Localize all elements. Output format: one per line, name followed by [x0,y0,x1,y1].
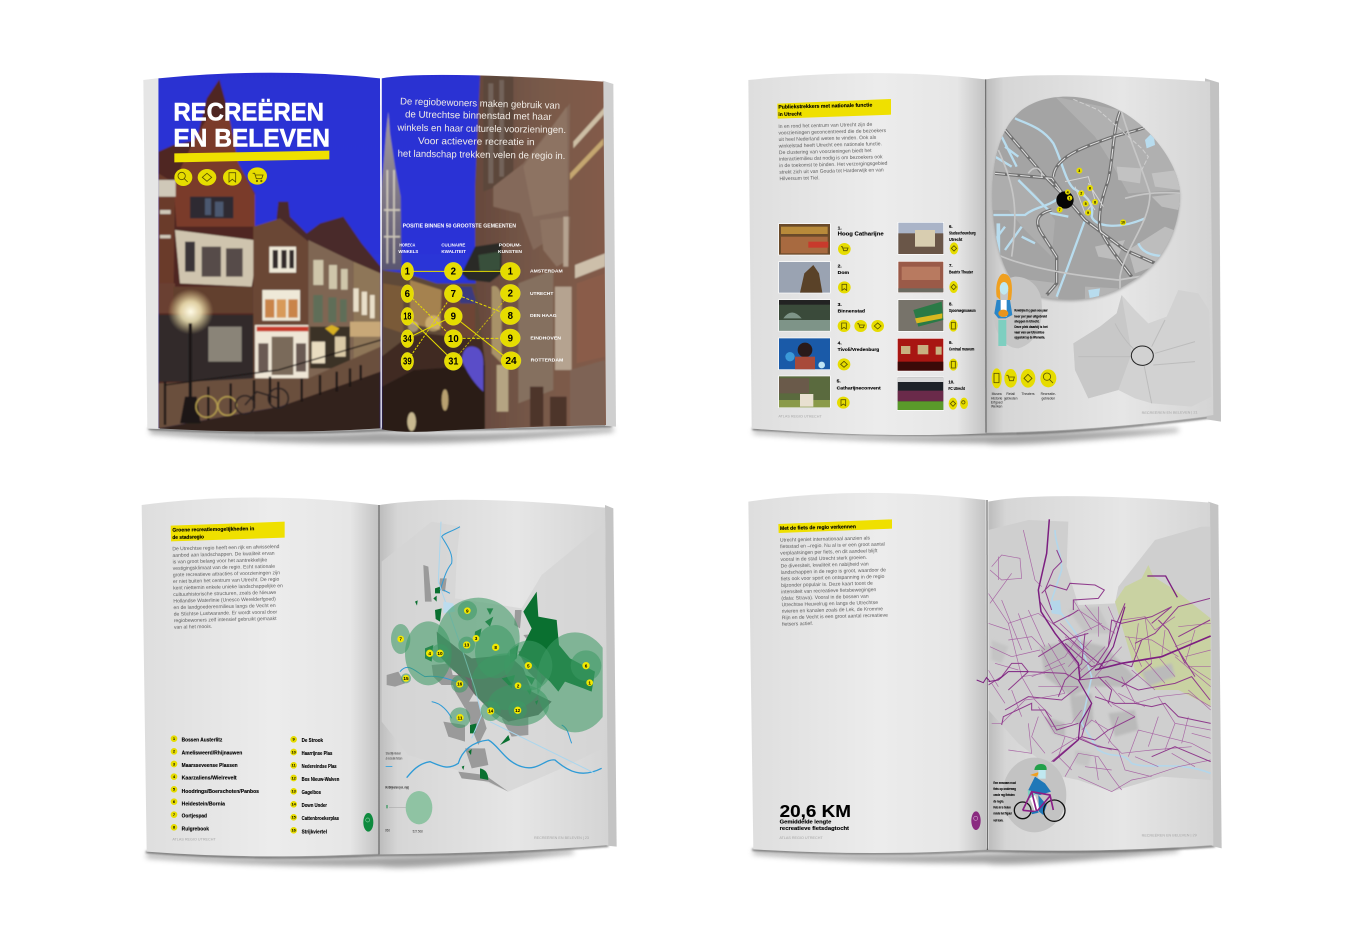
intro paragraph: Hollandse Waterlinie (Unesco Werelderfgoed) [173,596,276,605]
intro paragraph: In en rond het centrum van Utrecht zijn de [778,122,873,130]
bubble text: de regio. [993,799,1004,803]
point numbers: 3 [1078,169,1080,173]
item 10 [948,379,968,410]
intro paragraph: rivieren en kanalen zoals de Lek, de Kromme [782,606,883,615]
marker numbers: 7 [399,637,402,642]
right page [379,500,608,854]
spread 1: photo opening spread "Recreëren en beleven" [143,67,616,444]
title [173,99,330,152]
marker numbers: 1 [588,680,591,685]
numbered list of green areas: Kaarzaliens/Wielrevelt [182,776,237,782]
point numbers: 10 [1121,221,1125,225]
rank bubbles [401,262,521,370]
rank numbers: 9 [451,312,457,323]
spread 2 right page content [991,96,1198,414]
numbered list of green areas: Haarrijnse Plas [302,751,332,757]
numbered list of green areas: De Strook [302,738,323,744]
region base [988,520,1211,792]
numbered list of green areas: 5 [173,787,176,792]
numbered list of green areas: 8 [173,825,176,830]
marker numbers: 4 [428,651,431,656]
marker numbers: 14 [488,709,494,714]
legend [991,368,1056,409]
legend: Recreatie- [1041,392,1056,396]
intro text [396,96,566,162]
heading: Publiekstrekkers: Publiekstrekkers met nationale functie [778,103,872,111]
item 10: FC Utrecht [948,386,965,391]
intro paragraph: in de toekomst te binden. Het verzorgingsgebied [779,161,888,169]
numbered list of green areas: Bos Nieuw-Walven [302,777,339,783]
bubble text: fiets op onderweg [993,787,1016,791]
route crossing the spine [977,677,990,683]
intro paragraph: fiets ook voor sport en ontspanning in de regio [781,574,885,582]
centre marker [1056,191,1074,209]
bubble text: Fiets in te treken [993,805,1011,809]
category icons [174,167,267,186]
roads [995,112,1155,295]
item 10: 10. [948,379,954,384]
marker numbers: 15 [403,676,409,681]
heading: Met de fiets: Met de fiets de regio verkennen [780,524,856,532]
marker numbers: 6 [585,663,588,668]
rank numbers: 1 [508,267,514,278]
bubble text: ronde het figuur [993,811,1013,815]
map markers [397,607,593,721]
bubble text: Ruwbijna 8 ç gaan ooa paar [1014,309,1048,313]
rank numbers: 31 [448,357,459,368]
numbered list of green areas: 1 [173,736,176,741]
photo: Catharijneconvent [778,376,831,408]
intro paragraph: winkelstad heeft Utrecht een nationale functie. [779,141,882,150]
bubble text: opgeslokt op de Wismanta. [1014,336,1045,340]
spread 3 right page content [382,522,613,840]
numbered list of green areas: Down Under [302,803,327,809]
numbered list of green areas: 3 [173,761,176,766]
item 3 [838,302,884,332]
legend: gebieden [1004,396,1018,400]
column headers: PODIUM- [499,243,522,248]
intro paragraph: cultuurhistorische structuren, zoals de Nieuwe [173,590,276,598]
numbered list of green areas [171,735,339,835]
title underline [174,151,329,162]
numbered list of green areas: Heidestein/Bornia [182,802,225,808]
numbered list of green areas: 10 [291,749,297,754]
point numbers: 1 [1069,196,1071,200]
rank numbers: 24 [505,356,517,367]
character bubble [993,274,1048,348]
intro paragraph: Hilversum tot Tiel. [779,175,820,182]
city labels: EINDHOVEN [530,335,562,340]
numbered list of green areas: 7 [173,812,176,817]
heading: Groene recreatiemogelijkheden: Groene recreatiemogelijkheden in [172,526,254,534]
marker numbers: 2 [517,683,520,688]
heading: Groene recreatiemogelijkheden [171,522,285,541]
rank numbers: 8 [508,311,514,322]
intro paragraph: Utrecht geniet internationaal aanzien als [780,535,871,544]
photo: Binnenstad [778,299,831,331]
legend: visitors: Verblijvelen (en. mp) [385,785,409,789]
right page stack edge [605,505,617,847]
water [993,118,1182,297]
heading: Publiekstrekkers: in Utrecht [778,111,802,118]
spread 3 book body [142,497,617,868]
cyclist bubble [993,758,1066,832]
intro paragraph: aanbod aan landschappen. De kwaliteit ervan [172,551,275,559]
numbered list of green areas: 14 [291,802,297,807]
city labels: AMSTERDAM [530,268,563,273]
mini map: location in region [1073,290,1212,407]
spread 2 book body [748,73,1221,444]
numbered list of green areas: Maarsseveense Plassen [182,763,238,769]
intro paragraph: van al het moois. [174,624,212,631]
legend: Erfgoed [991,400,1003,404]
footer left: ATLAS REGIO UTRECHT [778,414,823,419]
legend: water [386,751,402,767]
marker numbers: 5 [527,663,530,668]
item 4 [838,340,879,370]
connecting lines [407,271,510,361]
rivers [400,527,602,778]
numbered list of green areas: 12 [291,775,297,780]
spine line [985,500,989,850]
rank numbers: 2 [451,267,456,278]
point numbers [1059,169,1125,225]
urban areas [386,565,528,792]
marker numbers: 16 [457,682,463,687]
spine line [984,79,987,433]
photo: Tivoli/Vredenburg [778,338,831,370]
item 5: 5. [837,379,841,385]
photo: Dom [778,261,831,293]
numbered list of green areas: 2 [173,749,176,754]
intro paragraph: en de landgoederenmilieus langs de Vecht en [173,603,276,611]
point numbers: 9 [1087,211,1089,215]
intro paragraph: De Utrechtse regio heeft een rijk en afwisselend [172,544,280,552]
left margin strip [143,78,160,429]
spread 2 left page content [777,99,976,419]
item 2 [838,264,851,293]
right page stack edge [1208,502,1222,848]
rank numbers: 34 [403,334,412,345]
big number stat: Gemiddelde lengte [780,819,831,825]
bubble text [993,781,1016,822]
intro text: het landschap trekken velen de regio in. [398,149,565,162]
item 6 [949,224,976,254]
water [1052,530,1211,773]
item 6: 6. [949,224,953,229]
marker numbers: 9 [466,608,469,613]
marker numbers [399,608,591,720]
left page [748,493,986,853]
photo: FC Utrecht [897,377,944,411]
column headers: HORECA [399,243,416,248]
bubble text: omde reg fietsten [993,793,1015,797]
legend: Retail [1006,392,1015,396]
item 5: Catharijneconvent [837,386,881,392]
intro paragraph: De diversiteit, kwaliteit en nabijheid van [781,561,869,570]
item 9: 9. [949,340,953,345]
big number stat: recreatieve fietsdagtocht [780,826,849,832]
numbered list of green areas: Strijkviertel [302,829,327,835]
column headers: CULINAIRE [441,243,465,248]
region base [382,556,552,792]
numbered list of green areas: 4 [173,774,176,779]
photo: left page [153,67,387,437]
numbered list of green areas: Nedereindse Plas [302,764,337,770]
legend: gebieden [1041,396,1055,400]
right page [988,496,1213,851]
numbered list of green areas: 9 [293,737,296,742]
urban patches [992,607,1175,767]
marker numbers: 8 [494,645,497,650]
rank numbers: 9 [508,333,514,344]
legend: visitors: 527.508 [413,829,423,833]
bubble text: Deze plek daarbij is het [1014,325,1048,329]
bubble text: Een eenzaam rood [993,781,1016,785]
intro paragraph: grote recreatieve attracties of voorzieningen zijn [173,570,280,578]
item 1 [838,225,884,255]
icon: purple page tab [971,811,981,830]
legend: visitors [385,785,432,833]
bubble text: keer per jaar uitgebreid [1014,314,1047,318]
dense centre [437,632,552,722]
item 3: 3. [838,302,842,308]
book shadow [752,417,1215,444]
spine line [377,505,380,854]
right page stack edge [1205,78,1221,422]
heading: Groene recreatiemogelijkheden: de stadsregio [172,534,204,541]
numbered list of green areas: 15 [291,815,297,820]
spread 3 left page content [171,522,373,842]
bubble text [1014,309,1048,340]
illustrated woman [994,274,1012,346]
item 7 [949,263,973,293]
big number stat: 20,6 KM [780,801,851,821]
marker numbers: 12 [515,708,521,713]
numbered list of green areas: 16 [291,828,297,833]
rank numbers [403,267,517,368]
legend: Historie [991,396,1002,400]
photo: Centraal museum [897,338,944,371]
rank numbers: 7 [451,289,456,300]
point numbers: 8 [1094,200,1096,204]
item 2: Dom [838,270,850,276]
intro paragraph: kent niettemin enkele unieke landschappelijke en [173,583,283,592]
photo: Beatrix Theater [898,261,944,293]
green forests [415,587,595,780]
point numbers: 2 [1080,192,1082,196]
legend: Musea [992,392,1002,396]
illustrated cyclist [1014,764,1065,821]
item 9 [949,340,974,371]
title: RECREËREN [173,99,324,127]
legend: visitors: 950 [385,829,390,833]
numbered list of green areas: Bossen Austerlitz [182,737,223,743]
big number stat [780,801,851,832]
rank numbers: 2 [508,289,513,300]
column headers [398,243,523,254]
footer left: ATLAS REGIO UTRECHT [779,836,824,840]
legend: water: Stedlijk kleien [386,751,401,755]
column headers: WINKELS [398,249,418,254]
marker numbers: 13 [464,643,470,648]
main routes [988,519,1211,762]
point numbers: 7 [1059,208,1061,212]
rank numbers: 6 [405,289,411,300]
intro paragraph: de Stichtse Lustwarande. Er wordt vooral door [174,609,278,618]
numbered list of green areas: 11 [292,763,297,768]
item 5 [837,379,881,409]
intro text: de Utrechtse binnenstad met haar [405,109,553,123]
item 7: 7. [949,263,953,268]
column headers: KUNSTEN [498,249,523,254]
city labels: ROTTERDAM [531,358,563,363]
heading: Publiekstrekkers [777,99,891,119]
rank numbers: 1 [405,267,411,278]
intro paragraph: strekt zich uit van Gouda tot Harderwijk en van [779,167,884,176]
intro paragraph: landschappen in de regio is groot, waardoor de [781,567,886,576]
intro paragraph: regiobewoners zelf intensief gebruikt gemaakt [174,616,277,624]
intro text: De regiobewoners maken gebruik van [400,96,560,112]
photo: Stadsschouwburg [898,222,944,255]
marker numbers: 11 [458,715,463,720]
intro paragraph: intensiteit van recreatieve fietsbewegingen [781,587,877,595]
numbered list of green areas: Oortjespad [182,814,207,820]
city labels: UTRECHT [530,291,553,296]
marker numbers: 3 [475,636,478,641]
numbered list of green areas: Cattenbroekerplas [302,816,339,822]
photo: right page [378,67,615,437]
thin routes [988,530,1211,792]
green heuvelrug [1115,565,1211,707]
item 8: Spoorwegmuseum [949,308,976,313]
numbered list of green areas: Gagelbos [302,790,321,796]
bubble text: vaar van uw Utrechtse [1014,330,1044,334]
intro paragraph: er niet buiten het centrum van Utrecht. De regio [173,577,280,585]
numbered list of green areas: Amelisweerd/Rhijnauwen [182,751,242,757]
chart heading: POSITIE BINNEN 50 GROOTSTE GEMEENTEN [403,223,516,229]
rank numbers: 18 [403,312,412,323]
item 4: Tivoli/Vredenburg [838,347,879,353]
left page [142,497,379,856]
left page [748,73,986,435]
footer right: RECREËREN EN BELEVEN | 23 [534,836,589,840]
intro paragraph: (data: Strava). Vooral in de bossen van [781,594,869,602]
intro paragraph: verplaatsingen per fiets, en dit aandeel blijft [780,548,878,557]
right page [986,75,1213,433]
map: recreation catchment areas [382,522,613,792]
item 1: 1. [838,225,842,231]
numbered list of green areas: 6 [173,799,176,804]
item 8: 8. [949,301,953,306]
rank numbers: 39 [403,357,412,368]
point numbers: 6 [1089,186,1091,190]
book shadow [148,426,613,444]
catchment circles [391,598,613,732]
page stack edge [603,81,616,427]
legend: Werken [991,405,1003,409]
numbered list of green areas: 13 [291,789,297,794]
footer right: RECREËREN EN BELEVEN | 29 [1142,833,1197,838]
photo: Spoorwegmuseum [898,299,944,332]
intro paragraph: uit heel Nederland weten te vinden. Ook als [779,135,877,143]
intro text: winkels en haar culturele voorzieningen. [396,123,566,136]
point numbers: 4 [1067,190,1070,194]
heading: Met de fiets [778,519,892,533]
item 1: Hoog Catharijne [838,232,884,238]
intro paragraph: bijzonder populair is. Deze kaart toont de [781,581,873,589]
intro paragraph: De clustering van voorzieningen biedt het [779,148,872,156]
intro paragraph: voorzieningen geconcentreerd die de bezoekers [778,128,887,137]
numbered list of green areas: Hoodrings/Boerschoten/Panbos [182,789,259,795]
intro paragraph: vestigingsklimaat van de regio. Echt nationale [173,564,275,572]
item 3: Binnenstad [838,308,865,314]
medium routes [988,550,1211,762]
intro text: Voor actievere recreatie in [418,136,535,148]
column headers: KWALITEIT [441,249,466,254]
intro paragraph: Utrechtse Heuvelrug en langs de Utrechtse [781,600,878,608]
intro paragraph: vooral in de stad Utrecht sterk groeien. [780,555,867,563]
item 7: Beatrix Theater [949,270,973,275]
item 9: Centraal museum [949,347,974,352]
item 4: 4. [838,340,842,346]
marker numbers: 10 [437,651,443,656]
point numbers: 5 [1085,202,1087,206]
intro paragraph: fietsstad en –regio. Nu al is er een groot aantal [780,542,885,550]
title: EN BELEVEN [173,124,330,152]
intro paragraph: is van groot belang voor het aantrekkelijke [173,557,267,565]
footer right: RECREËREN EN BELEVEN | 21 [1142,411,1198,415]
map: centre of Utrecht blob [992,96,1181,302]
photo: Hoog Catharijne [778,223,831,255]
item 6: Utrecht [949,237,963,242]
footer left: ATLAS REGIO UTRECHT [172,838,217,842]
item 2: 2. [838,264,842,270]
numbered points [1057,168,1126,225]
bubble text: vol kom. [993,818,1003,822]
list of attractions [778,222,976,411]
intro paragraph: interactiemilieu dat nodig is om bezoekers ook [779,154,883,163]
city labels [530,268,563,363]
book shadow [752,846,1215,864]
ranking chart: positie binnen 50 grootste gemeenten [398,223,563,370]
rank numbers: 10 [448,334,459,345]
item 6: Stadsschouwburg [949,231,976,236]
icon: green page tab [363,813,373,832]
book shadow [146,846,608,868]
city labels: DEN HAAG [530,313,557,318]
numbered list of green areas: Rulgrebook [182,826,209,832]
intro paragraph: fietsers actief. [782,621,813,628]
map: recreational cycling intensity [977,519,1211,792]
spread 4: cycling [748,493,1222,864]
location circle [1131,346,1153,365]
intro paragraph: Rijn en de Vecht is een groot aantal recreatieve [782,613,888,621]
legend: water: & recreatie fietsen [386,756,402,760]
item 8 [949,301,976,332]
legend: Theaters [1021,392,1035,396]
bubble text: shoppen in Utrecht. [1014,320,1039,324]
